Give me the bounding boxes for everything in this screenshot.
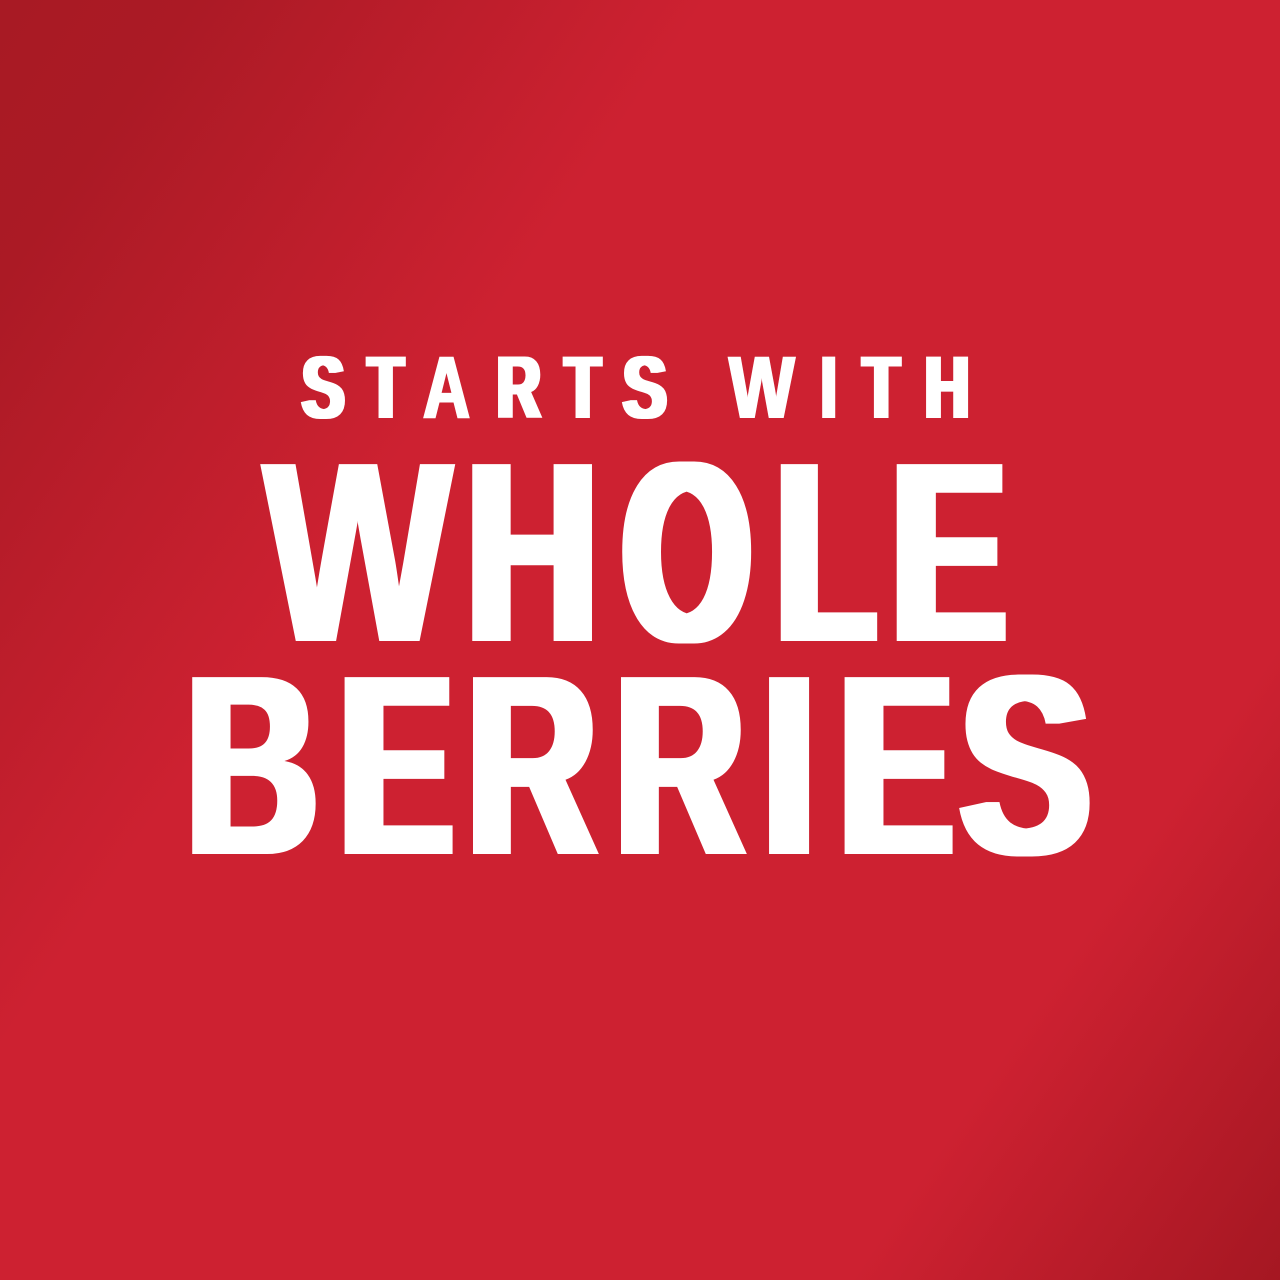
- headline word: berries: S: [960, 622, 1091, 909]
- headline word: berries: I: [763, 622, 816, 909]
- subheading: starts with: W: [729, 338, 795, 437]
- headline word: whole: L: [777, 409, 876, 696]
- headline word: berries: [186, 622, 1091, 909]
- subheading: starts with: S: [623, 338, 667, 437]
- subheading: starts with: T: [565, 338, 600, 437]
- headline word: whole: E: [893, 409, 1005, 696]
- headline word: whole: H: [466, 409, 598, 696]
- headline word: whole: O: [623, 409, 750, 696]
- subheading: starts with: R: [497, 338, 540, 437]
- headline word: berries: B: [186, 622, 318, 909]
- subheading: starts with: H: [925, 338, 969, 437]
- subheading: starts with: I: [821, 338, 837, 437]
- headline word: whole: [260, 409, 1006, 696]
- heading: starts with whole berries: [186, 338, 1091, 909]
- headline word: whole: W: [263, 409, 453, 696]
- headline word: berries: E: [341, 622, 452, 909]
- subheading: starts with: [300, 338, 969, 437]
- subheading: starts with: T: [863, 338, 899, 437]
- subheading: starts with: T: [368, 338, 403, 437]
- subheading: starts with: S: [302, 338, 344, 437]
- headline word: berries: R: [615, 622, 744, 909]
- headline word: berries: E: [841, 622, 952, 909]
- subheading: starts with: A: [423, 338, 471, 437]
- headline word: berries: R: [467, 622, 596, 909]
